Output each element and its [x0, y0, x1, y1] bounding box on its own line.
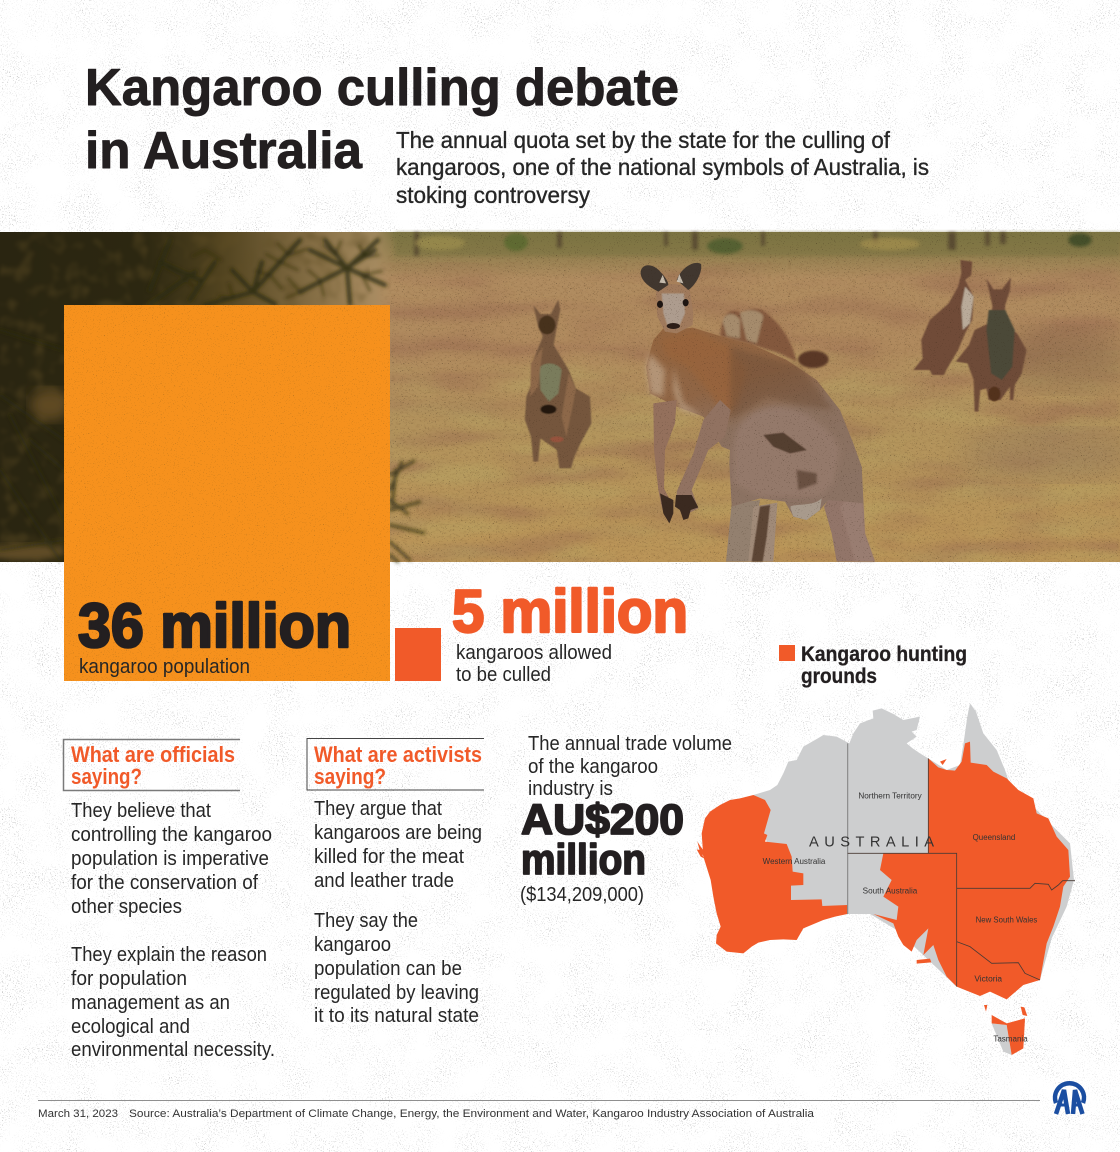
source line: March 31, 2023 [38, 1108, 118, 1120]
map: landmass in grey [753, 703, 1074, 987]
photo: pine tree background [0, 232, 395, 562]
map: labels: South Australia [863, 886, 918, 895]
kangaroo: large foreground [641, 263, 875, 562]
title [85, 59, 679, 180]
title: in Australia [85, 122, 363, 180]
photo: pine branches [0, 240, 424, 562]
body [646, 328, 863, 520]
photo: distant tree line [395, 232, 1120, 256]
subtitle [396, 127, 929, 208]
panel: what officials are saying: for the conservation of [71, 872, 258, 894]
map: labels [763, 792, 1037, 1043]
panel: what activists are saying: regulated by leaving [314, 982, 479, 1004]
panel: what activists are saying: saying? [314, 764, 386, 789]
kangaroo: grazing in the back [641, 263, 875, 562]
panel: what activists are saying: What are activists [314, 742, 482, 767]
panel: what officials are saying: other species [71, 896, 182, 918]
kangaroo: right, side-on [913, 260, 974, 375]
icon: Anadolu Agency logo [1055, 1083, 1084, 1114]
stat: 36 million: kangaroo population [79, 656, 250, 678]
far arm [653, 400, 677, 517]
panel: what activists are saying [307, 738, 484, 1027]
title: Kangaroo culling debate [85, 59, 679, 117]
map: hunting grounds, eastern states [873, 742, 1070, 999]
panel: what activists are saying: kangaroo [314, 934, 391, 956]
panel: what officials are saying: controlling the kangaroo [71, 824, 272, 846]
panel: what activists are saying: population can be [314, 958, 462, 980]
map: hunting grounds, Western Australia [702, 795, 847, 953]
map: labels: Queensland [973, 833, 1015, 842]
head [656, 284, 693, 333]
map: labels: AUSTRALIA [809, 835, 934, 851]
panel: what officials are saying [64, 740, 275, 1061]
panel: what officials are saying: What are officials [71, 742, 235, 767]
footer rule [38, 1100, 1040, 1101]
source line: Source: Australia’s Department of Climate Change, Energy, the Environment and Water, Kangaroo Industry Association of Australia [129, 1108, 815, 1120]
panel: what officials are saying: saying? [71, 764, 142, 789]
trade volume figure: million [521, 836, 646, 884]
stat: 5 million: 5 million [452, 578, 688, 645]
trade volume figure: The annual trade volume [528, 733, 732, 755]
stat: 5 million: to be culled [456, 664, 551, 686]
kangaroo: right, facing camera [956, 277, 1027, 412]
panel: what activists are saying: They argue that [314, 798, 442, 820]
panel: what activists are saying: They say the [314, 910, 418, 932]
panel: what officials are saying: They explain the reason [71, 944, 267, 966]
map: state borders [846, 743, 849, 914]
body: chest highlight and shoulder [646, 353, 703, 417]
trade volume figure: industry is [528, 778, 613, 800]
trade volume figure: of the kangaroo [528, 756, 658, 778]
subtitle: The annual quota set by the state for the culling of [396, 127, 891, 153]
ears [641, 265, 668, 292]
photo: film grain [390, 232, 1120, 562]
stat: 5 million [452, 578, 688, 686]
trade volume figure: AU$200 [521, 796, 684, 844]
map: labels: Victoria [974, 974, 1003, 983]
legs [726, 500, 760, 562]
map legend: grounds [801, 665, 877, 688]
subtitle: kangaroos, one of the national symbols of Australia, is [396, 154, 929, 180]
photo: back kangaroos [525, 260, 1027, 468]
panel: what activists are saying: and leather trade [314, 870, 454, 892]
panel: what activists are saying: killed for the meat [314, 846, 464, 868]
map: labels: Tasmania [993, 1034, 1028, 1043]
stat: 5 million: kangaroos allowed [456, 642, 612, 664]
panel: what officials are saying: They believe that [71, 800, 211, 822]
panel: what officials are saying: population is imperative [71, 848, 269, 870]
panel: what officials are saying: management as an [71, 992, 230, 1014]
subtitle: stoking controversy [396, 182, 590, 208]
panel: what officials are saying: for population [71, 968, 187, 990]
trade volume figure: ($134,209,000) [520, 884, 644, 906]
kangaroo: left, mid distance [525, 299, 591, 468]
map: labels: Western Australia [763, 857, 826, 866]
panel: what officials are saying: environmental necessity. [71, 1039, 275, 1061]
red square: kangaroos to be culled [395, 628, 441, 681]
stat: 36 million: 36 million [78, 592, 351, 661]
orange square: kangaroo population [64, 305, 390, 681]
panel: what activists are saying: kangaroos are being [314, 822, 482, 844]
panel: what activists are saying: it to its natural state [314, 1005, 479, 1027]
map: labels: New South Wales [976, 916, 1037, 925]
tail [824, 467, 875, 562]
panel: what officials are saying: ecological and [71, 1016, 190, 1038]
map: Tasmania [992, 1023, 1012, 1055]
trade volume figure [520, 733, 732, 906]
map: west coast islets [697, 842, 708, 860]
map: labels: Northern Territory [858, 792, 922, 801]
map of Australia [697, 703, 1075, 1055]
map: hunting grounds, islands [917, 759, 1027, 1016]
photo: grass patches [380, 255, 1120, 562]
map legend: Kangaroo hunting [801, 643, 967, 666]
kangaroo photo [0, 232, 1120, 562]
map legend [779, 643, 967, 688]
near arm [677, 400, 731, 513]
